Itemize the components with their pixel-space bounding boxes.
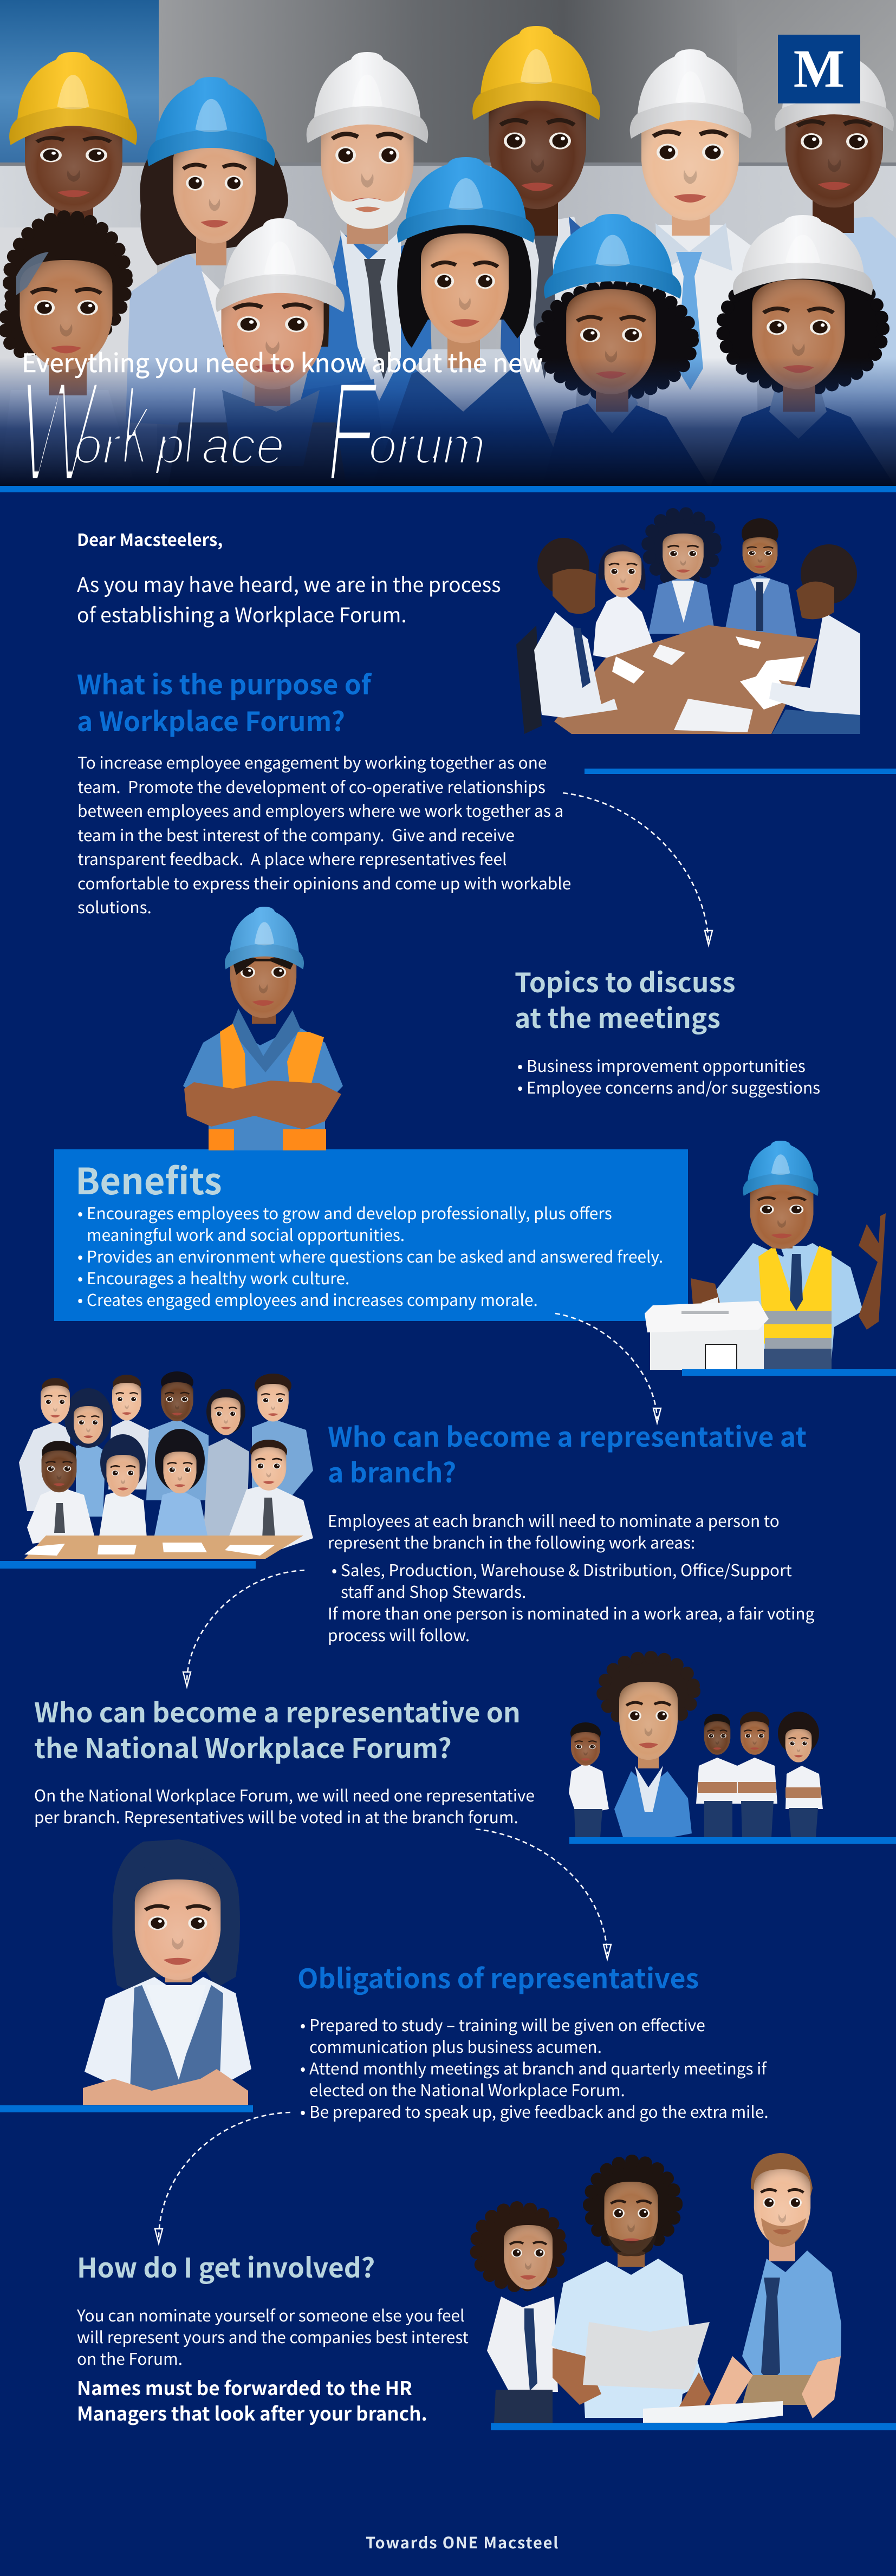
intro text: of establishing a Workplace Forum. xyxy=(77,599,407,628)
text: • xyxy=(77,1265,83,1289)
chair xyxy=(516,626,542,734)
obligations list: Be prepared to speak up, give feedback and go the extra mile. xyxy=(309,2099,769,2123)
call to action: Managers that look after your branch. xyxy=(77,2399,427,2427)
heading: topics: at the meetings xyxy=(515,997,720,1036)
text: • xyxy=(517,1053,523,1077)
purpose text: comfortable to express their opinions and come up with workable xyxy=(77,870,571,894)
desk and papers xyxy=(24,1536,303,1559)
branch text: process will follow. xyxy=(328,1622,470,1646)
purpose text: between employees and employers where we work together as a xyxy=(77,798,563,822)
worker 2: woman, blue hat xyxy=(126,77,288,428)
text: • xyxy=(300,2099,306,2123)
greeting: Dear Macsteelers, xyxy=(77,526,223,551)
hero script title: l xyxy=(184,367,197,486)
national text: On the National Workplace Forum, we will need one representative xyxy=(34,1783,535,1806)
text: • xyxy=(77,1244,83,1267)
purpose text: team. Promote the development of co-operative relationships xyxy=(77,773,546,797)
heading: national representative xyxy=(34,1692,521,1766)
purpose text: solutions. xyxy=(77,894,152,918)
get involved text: will represent yours and the companies best interest xyxy=(77,2324,469,2348)
text: • xyxy=(517,1075,523,1098)
heading: obligations: Obligations of representatives xyxy=(297,1957,699,1996)
front left man xyxy=(534,538,618,718)
heading: branch representative: a branch? xyxy=(328,1452,456,1491)
obligations list: elected on the National Workplace Forum. xyxy=(309,2077,625,2101)
benefits list xyxy=(77,1200,663,1311)
hero image: team in hard hats xyxy=(0,0,896,491)
background wall panels xyxy=(0,0,896,491)
topics list xyxy=(517,1053,820,1098)
illustration: branch staff group xyxy=(19,1371,313,1559)
table and papers xyxy=(554,625,817,734)
purpose text: To increase employee engagement by working together as one xyxy=(77,750,547,773)
purpose text: team in the best interest of the company. Give and receive xyxy=(77,822,515,846)
purpose text xyxy=(77,750,571,918)
woman xyxy=(476,2208,561,2423)
national text xyxy=(34,1783,535,1828)
obligations list: communication plus business acumen. xyxy=(309,2034,602,2058)
branch text: If more than one person is nominated in a work area, a fair voting xyxy=(328,1601,814,1624)
arrow: branch to national xyxy=(183,1570,304,1687)
divider bar xyxy=(585,769,896,774)
heading: national representative: Who can become a representative on xyxy=(34,1692,521,1731)
worker 10: curly-haired woman, blue hat xyxy=(541,214,710,487)
hero script title: W xyxy=(18,352,101,512)
hero divider bar xyxy=(0,486,896,492)
logo: Macsteel M xyxy=(778,35,860,103)
text: • xyxy=(77,1287,83,1311)
illustration: worker with orange vest xyxy=(183,907,343,1150)
heading: purpose: a Workplace Forum? xyxy=(77,700,345,739)
heading: topics xyxy=(515,961,736,1036)
branch text: Employees at each branch will need to nominate a person to xyxy=(328,1508,780,1532)
hero script title: F xyxy=(326,352,379,512)
benefits list: Encourages employees to grow and develop professionally, plus offers xyxy=(87,1200,612,1224)
illustration: three colleagues with paper xyxy=(476,2153,841,2423)
hero subtitle: Everything you need to know about the new xyxy=(22,342,543,380)
small people group xyxy=(696,1712,823,1837)
arrow: national to obligations xyxy=(476,1829,611,1959)
heading: get involved: How do I get involved? xyxy=(77,2247,375,2286)
illustration: worker voting at ballot box xyxy=(645,1141,886,1370)
worker 8: boy, white hat xyxy=(168,218,347,487)
purpose text: transparent feedback. A place where representatives feel xyxy=(77,846,507,870)
hero script title: k xyxy=(122,367,151,486)
topics list: Employee concerns and/or suggestions xyxy=(527,1075,820,1098)
benefits list: Creates engaged employees and increases company morale. xyxy=(87,1287,538,1311)
text: • xyxy=(77,1200,83,1224)
divider bar xyxy=(0,2105,253,2112)
get involved text xyxy=(77,2302,469,2370)
hero script title: ace xyxy=(202,417,284,474)
text: • xyxy=(300,2055,306,2079)
paper and table xyxy=(583,2322,783,2423)
benefits list: meaningful work and social opportunities. xyxy=(87,1222,405,1246)
back row xyxy=(19,1371,313,1538)
worker 7: left woman, curly hair xyxy=(0,217,135,487)
branch text xyxy=(328,1508,814,1646)
heading: benefits: Benefits xyxy=(75,1153,222,1205)
divider bar xyxy=(569,1837,896,1844)
benefits list: Provides an environment where questions can be asked and answered freely. xyxy=(87,1244,663,1267)
small man 1 xyxy=(569,1722,609,1837)
logo: Macsteel M: M xyxy=(794,38,845,99)
right man xyxy=(710,2153,841,2418)
worker 11: right woman, white hat xyxy=(710,215,896,487)
worker 3: senior man with beard xyxy=(293,52,433,487)
worker 4: yellow hat xyxy=(472,26,600,433)
heading: topics: Topics to discuss xyxy=(515,961,736,1000)
worker 6: white hat, right xyxy=(775,49,896,487)
get involved text: on the Forum. xyxy=(77,2346,183,2370)
divider bar xyxy=(0,1561,256,1569)
worker 1: yellow hat xyxy=(0,52,157,455)
footer tagline: Towards ONE Macsteel xyxy=(366,2531,559,2553)
branch text: represent the branch in the following work areas: xyxy=(328,1530,695,1553)
panel: benefits xyxy=(54,1149,688,1321)
main woman xyxy=(603,1657,694,1837)
arrow: benefits to branch representatives xyxy=(555,1313,661,1423)
front row xyxy=(27,1429,313,1549)
arrow: obligations to get involved xyxy=(155,2112,290,2243)
heading: branch representative xyxy=(328,1416,807,1491)
heading: national representative: the National Workplace Forum? xyxy=(34,1727,452,1766)
illustration: female representative xyxy=(83,1839,251,2105)
heading: branch representative: Who can become a representative at xyxy=(328,1416,807,1455)
intro text xyxy=(77,569,501,628)
hero script title: or xyxy=(74,417,121,474)
arrow: purpose to topics xyxy=(563,793,712,945)
heading: purpose: What is the purpose of xyxy=(77,663,371,702)
front right man xyxy=(769,544,860,734)
heading: purpose xyxy=(77,663,372,739)
obligations list: Prepared to study – training will be given on effective xyxy=(309,2012,705,2036)
branch text: Sales, Production, Warehouse & Distribution, Office/Support xyxy=(341,1557,792,1581)
hero script title: orum xyxy=(368,417,485,474)
centre man xyxy=(551,2161,711,2418)
hero fade xyxy=(0,357,896,487)
worker 9: centre woman, blue hat xyxy=(276,157,572,487)
branch text: • xyxy=(332,1557,337,1581)
intro text: As you may have heard, we are in the process xyxy=(77,569,501,598)
worker 5: white hat xyxy=(630,49,758,487)
benefits list: Encourages a healthy work culture. xyxy=(87,1265,349,1289)
call to action xyxy=(77,2374,427,2427)
divider bar xyxy=(491,2423,896,2430)
obligations list xyxy=(300,2012,769,2123)
national text: per branch. Representatives will be voted in at the branch forum. xyxy=(34,1804,518,1828)
divider bar xyxy=(682,1369,896,1376)
obligations list: Attend monthly meetings at branch and quarterly meetings if xyxy=(309,2055,767,2079)
illustration: national forum representatives xyxy=(569,1657,823,1837)
branch text: staff and Shop Stewards. xyxy=(341,1579,526,1603)
hero script title: p xyxy=(154,417,185,474)
get involved text: You can nominate yourself or someone else you feel xyxy=(77,2302,464,2326)
topics list: Business improvement opportunities xyxy=(527,1053,806,1077)
image: meeting around table xyxy=(516,513,860,734)
back people xyxy=(593,513,797,663)
hero script title xyxy=(18,352,485,512)
text: • xyxy=(300,2012,306,2036)
call to action: Names must be forwarded to the HR xyxy=(77,2374,412,2401)
